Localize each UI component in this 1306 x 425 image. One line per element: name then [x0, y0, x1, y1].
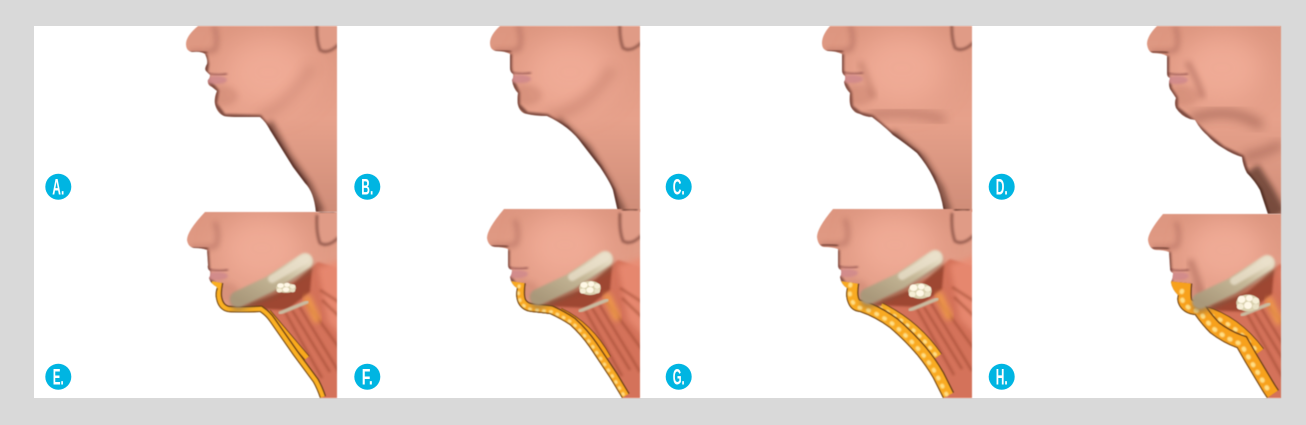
- panel: anatomy F: [486, 208, 641, 399]
- anatomy layers F: [516, 254, 650, 413]
- gland H: [1236, 295, 1260, 311]
- badge F: F.: [362, 364, 373, 390]
- badge H: [989, 364, 1015, 390]
- badge D: D.: [996, 174, 1008, 200]
- badge D: [989, 174, 1015, 200]
- badge C: [666, 174, 692, 200]
- badge C: C.: [673, 174, 685, 200]
- badge B: B.: [361, 174, 373, 200]
- gland E: [276, 283, 296, 293]
- panel: anatomy G: [816, 208, 973, 399]
- anatomy layers E: [210, 252, 338, 399]
- badge F: [354, 364, 380, 390]
- badge G: [666, 364, 692, 390]
- gland F: [579, 281, 601, 295]
- anatomy layers H: [1170, 254, 1282, 398]
- badge E: E.: [53, 364, 64, 390]
- panel: profile C: [822, 10, 974, 214]
- badge G: G.: [673, 364, 685, 390]
- badge H: H.: [996, 364, 1008, 390]
- panel: profile B: [490, 10, 642, 214]
- badge E: [45, 364, 71, 390]
- panel: profile A: [186, 12, 339, 214]
- gland G: [908, 283, 932, 299]
- panel: anatomy H: [1147, 213, 1282, 399]
- badge B: [354, 174, 380, 200]
- anatomy layers G: [846, 253, 982, 412]
- badge A: [45, 174, 71, 200]
- badge A: A.: [52, 174, 64, 200]
- panel: anatomy E: [186, 211, 338, 399]
- panel: profile D: [1147, 26, 1282, 216]
